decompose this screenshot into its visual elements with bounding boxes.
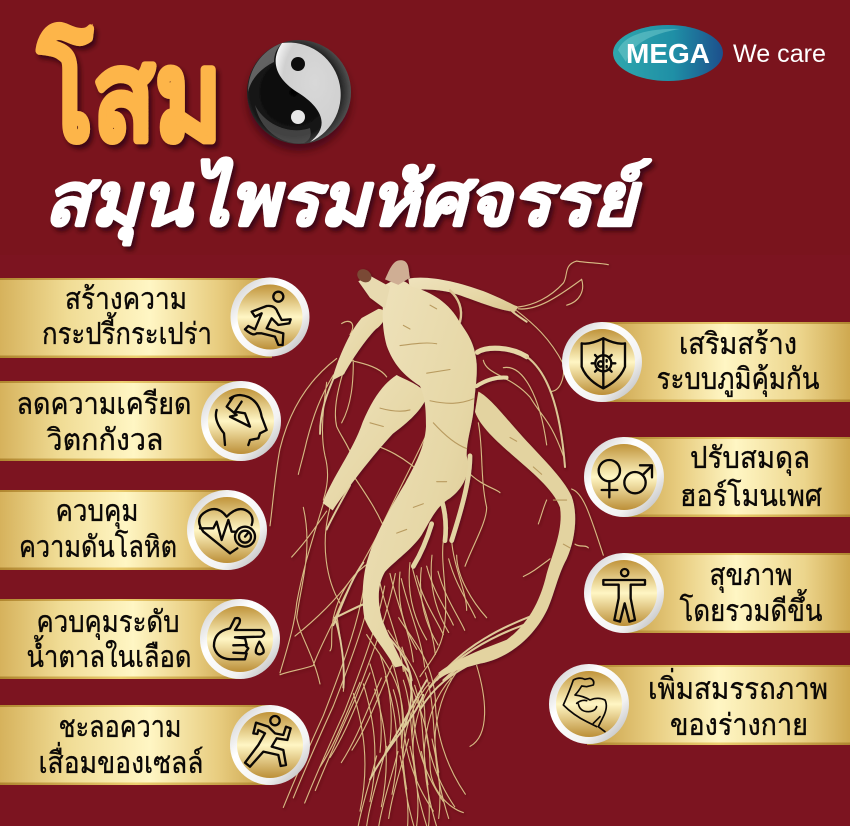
crown nub, dark [355, 267, 373, 285]
icon: runner [245, 292, 291, 345]
icon: finger with blood drop [214, 618, 264, 659]
panel: เพิ่มสมรรถภาพ ของร่างกาย: เพิ่มสมรรถภาพ [648, 668, 828, 706]
panel: สุขภาพ โดยรวมดีขึ้น [584, 553, 850, 633]
title: โสม: โสม [36, 24, 222, 167]
main body [363, 280, 477, 667]
dense lower rootlet bundle, offset left [283, 572, 443, 826]
short right spur [477, 377, 507, 386]
photo backdrop: red fabric [0, 255, 850, 826]
panel: เสริมสร้าง ระบบภูมิคุ้มกัน: เสริมสร้าง [679, 328, 797, 361]
logo: MEGA We care: MEGA [626, 38, 710, 69]
logo: MEGA We care: We care [733, 40, 826, 68]
panel: ลดความเครียด วิตกกังวล: ลดความเครียด [16, 388, 192, 421]
panel: สร้างความ กระปรี้กระเปร่า: สร้างความ [65, 283, 187, 316]
panel: สุขภาพ โดยรวมดีขึ้น: โดยรวมดีขึ้น [680, 589, 822, 628]
panel: เพิ่มสมรรถภาพ ของร่างกาย [549, 664, 850, 745]
dense lower rootlet bundle [293, 563, 453, 826]
left leg [323, 375, 427, 510]
icon: shield with virus [582, 338, 625, 388]
panel: สร้างความ กระปรี้กระเปร่า [0, 278, 310, 358]
icon: yin yang sphere [247, 40, 351, 144]
upper left arm [332, 309, 385, 381]
icon: jointed running figure [245, 716, 291, 767]
panel: เพิ่มสมรรถภาพ ของร่างกาย: ของร่างกาย [670, 709, 808, 742]
panel: ควบคุมระดับ น้ำตาลในเลือด: น้ำตาลในเลือด [26, 635, 192, 674]
icon: gender symbols [599, 460, 652, 497]
crown nub, pink [385, 260, 410, 285]
panel: ลดความเครียด วิตกกังวล: วิตกกังวล [46, 424, 163, 457]
panel: ชะลอความ เสื่อมของเซลล์: ชะลอความ [58, 711, 182, 744]
icon: flexed arm [563, 678, 606, 732]
subtitle: สมุนไพรมหัศจรรย์: สมุนไพรมหัศจรรย์ [44, 157, 652, 246]
panel: ควบคุม ความดันโลหิต: ควบคุม [56, 495, 138, 530]
logo: MEGA We care [613, 25, 826, 81]
lower fingers [413, 456, 470, 566]
panel: เสริมสร้าง ระบบภูมิคุ้มกัน [562, 322, 850, 402]
icon: standing person with arms out [603, 569, 645, 622]
panel: สุขภาพ โดยรวมดีขึ้น: สุขภาพ [710, 559, 792, 594]
panel: ควบคุมระดับ น้ำตาลในเลือด [0, 599, 280, 679]
panel: เสริมสร้าง ระบบภูมิคุ้มกัน: ระบบภูมิคุ้มกัน [656, 363, 820, 398]
dense lower rootlet bundle, offset right [305, 568, 465, 826]
panel: ควบคุม ความดันโลหิต [0, 490, 267, 570]
right leg [438, 392, 575, 678]
upper right arm [408, 278, 518, 312]
root crown [358, 276, 390, 309]
panel: สร้างความ กระปรี้กระเปร่า: กระปรี้กระเปร่า [42, 312, 212, 351]
icon: head with lightning [216, 395, 267, 445]
panel: ควบคุมระดับ น้ำตาลในเลือด: ควบคุมระดับ [36, 606, 180, 641]
panel: ปรับสมดุล ฮอร์โมนเพศ: ฮอร์โมนเพศ [680, 478, 822, 513]
dense lower rootlet bundle, offset far right [315, 555, 475, 818]
panel: ปรับสมดุล ฮอร์โมนเพศ: ปรับสมดุล [690, 442, 810, 477]
skin markings [370, 305, 570, 548]
right arm, thin part [527, 357, 565, 467]
right arm, thick part [477, 348, 527, 357]
shoulder spur [450, 290, 461, 322]
panel: ลดความเครียด วิตกกังวล [0, 381, 281, 461]
thin rootlets [270, 261, 608, 813]
panel: ปรับสมดุล ฮอร์โมนเพศ [584, 437, 850, 517]
thicker root strands [320, 307, 537, 779]
panel: ควบคุม ความดันโลหิต: ความดันโลหิต [19, 529, 177, 564]
panel: ชะลอความ เสื่อมของเซลล์: เสื่อมของเซลล์ [38, 742, 204, 780]
panel: ชะลอความ เสื่อมของเซลล์ [0, 705, 310, 785]
icon: heart with gauge [199, 509, 255, 553]
ginseng root photo [270, 260, 608, 826]
